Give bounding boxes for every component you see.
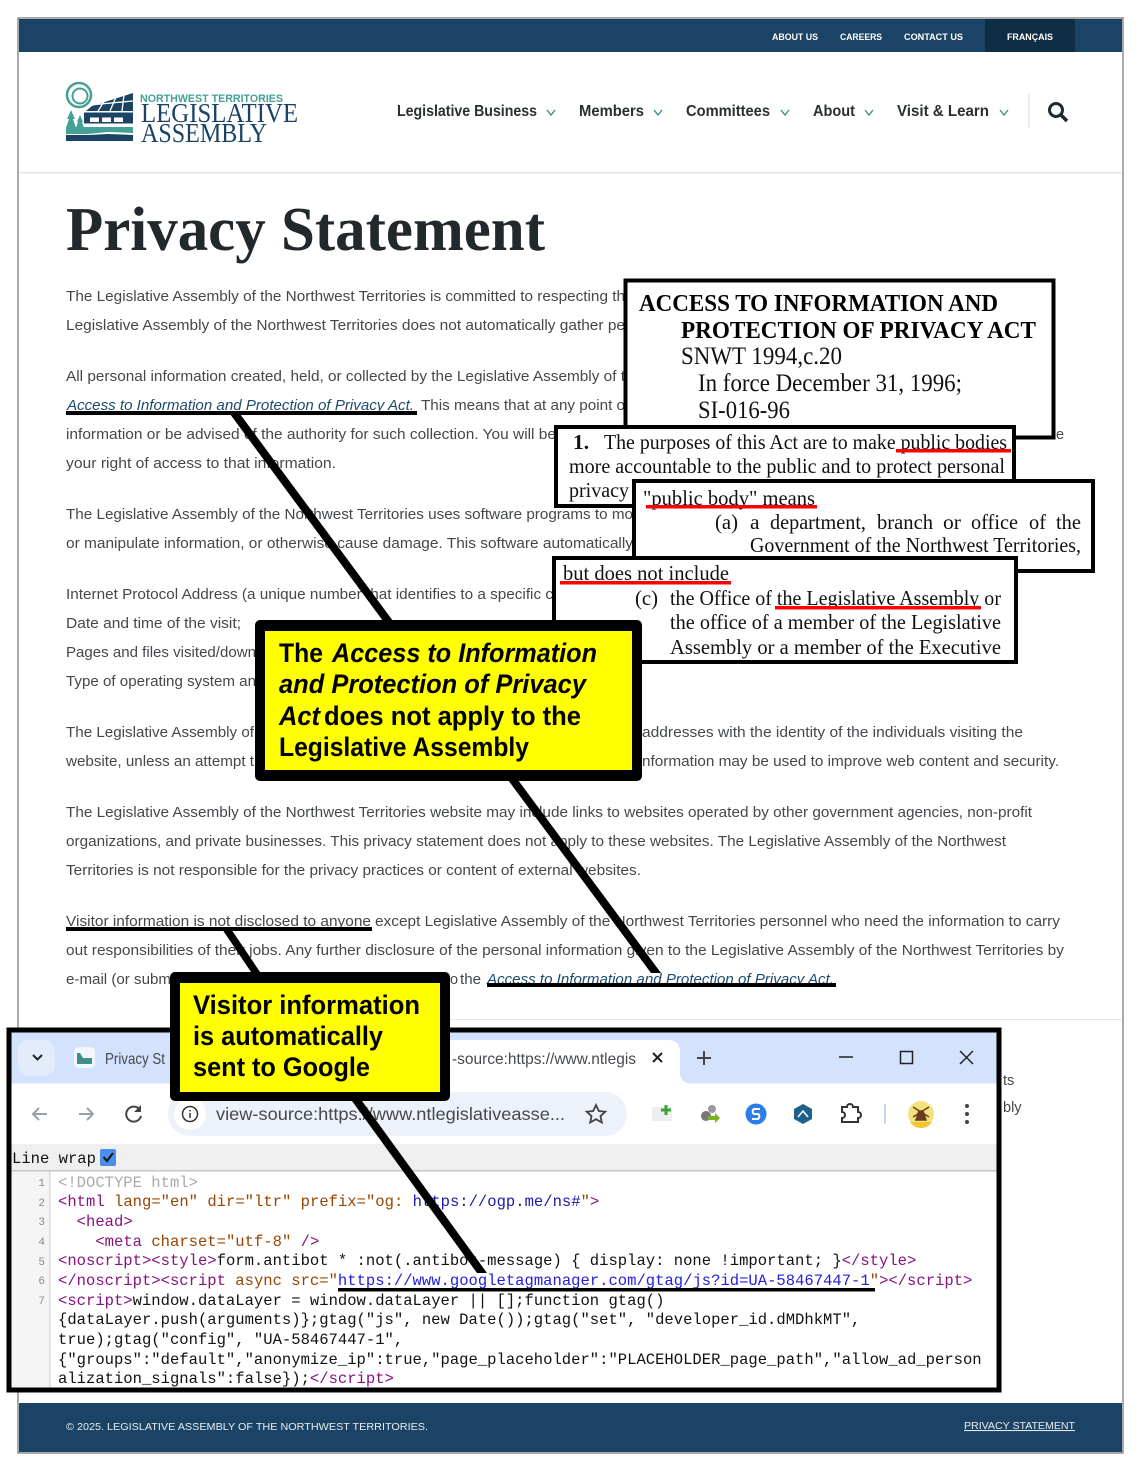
body text: privacy statement paragraphs: e (1056, 427, 1064, 443)
body text: privacy statement paragraphs: The Legislative Assembly of the Northwest Territories is committed to respecting th (66, 289, 625, 305)
source code listing: 7 (38, 1296, 45, 1308)
body text: privacy statement paragraphs: Pages and files visited/down (66, 645, 256, 661)
body text: privacy statement paragraphs: out responsibilities of their jobs. Any further disclosure of the personal information given to the Legislative Assembly of the Northwest Territories by (66, 943, 1065, 959)
source code listing: <noscript><style>form.antibot * :not(.antibot-message) { display: none !important; }</style> (58, 1252, 916, 1270)
main navigation: Members (579, 103, 644, 120)
main navigation: About (813, 103, 855, 120)
callout: Visitor information sent to Google: Visitor information (193, 990, 420, 1020)
body text: privacy statement paragraphs: Internet Protocol Address (a unique number that identifies to a specific c (66, 587, 553, 603)
logo: Northwest Territories Legislative Assembly (66, 83, 298, 148)
source code listing: true);gtag("config", "UA-58467447-1", (58, 1331, 403, 1349)
panel: exclusion of the Legislative Assembly excerpt: (c) (635, 586, 658, 610)
source code listing: {dataLayer.push(arguments)};gtag("js", new Date());gtag("set", "developer_id.dMDhkMT", (58, 1311, 860, 1329)
browser toolbar with address bar: view-source:https://www.ntlegislativeasse... (216, 1104, 565, 1124)
body text: privacy statement paragraphs: Legislative Assembly of the Northwest Territories does not automatically gather pe (66, 318, 625, 334)
source code listing: 6 (38, 1276, 45, 1288)
main navigation: Visit & Learn (897, 103, 989, 120)
source code listing: 4 (38, 1237, 45, 1249)
line wrap option bar (12, 1144, 996, 1172)
callout: Visitor information sent to Google: is automatically (193, 1021, 383, 1051)
main navigation: Committees (686, 103, 770, 120)
callout: Act does not apply to the Legislative Assembly: Access to Information (331, 638, 597, 668)
panel: Act title excerpt: In force December 31, 1996; (698, 370, 962, 397)
main navigation: Legislative Business (397, 103, 537, 120)
body text: privacy statement paragraphs: The Legislative Assembly of the Northwest Territories website may include links to websites operated by other government agencies, non-profit (66, 805, 1032, 821)
source code listing: </noscript><script async src="https://www.googletagmanager.com/gtag/js?id=UA-58467447-1"></script> (58, 1272, 972, 1290)
source code listing: 2 (38, 1198, 45, 1210)
annotation: Google Tag Manager link underline and leader line (338, 1101, 875, 1292)
panel: exclusion of the Legislative Assembly excerpt: but does not include (563, 561, 729, 585)
browser tab bar: Privacy St (105, 1051, 165, 1068)
body text: privacy statement paragraphs: except Legislative Assembly of the Northwest Territories personnel who need the information to carry (375, 914, 1061, 930)
callout: Act does not apply to the Legislative Assembly: The (279, 638, 323, 668)
source code listing: <meta charset="utf-8" /> (58, 1233, 319, 1251)
body text: privacy statement paragraphs: nformation may be used to improve web content and security. (642, 754, 1059, 770)
icon: search (1050, 104, 1067, 121)
browser toolbar with address bar (12, 1084, 996, 1144)
panel: public body definition excerpt: Government of the Northwest Territories, (750, 533, 1081, 557)
panel: Act title excerpt (626, 280, 1054, 438)
panel: Act title excerpt: SI-016-96 (698, 397, 790, 424)
panel: public body definition excerpt: branch (877, 510, 933, 534)
source code listing: alization_signals":false});</script> (58, 1370, 394, 1388)
panel: public body definition excerpt: of (1029, 510, 1047, 534)
body text: privacy statement paragraphs: addresses with the identity of the individuals visiting the (642, 725, 1023, 741)
body text: privacy statement paragraphs: information or be advised of the authority for such collection. You will be (66, 427, 556, 443)
body text: privacy statement paragraphs: This means that at any point o (421, 398, 625, 414)
panel: public body definition excerpt: a (750, 510, 760, 534)
source code listing: {"groups":"default","anonymize_ip":true,"page_placeholder":"PLACEHOLDER_page_path","allow_ad_person (58, 1351, 982, 1369)
panel: purposes of the Act excerpt: privacy (569, 478, 629, 502)
logo: Northwest Territories Legislative Assembly: NORTHWEST TERRITORIES (140, 93, 283, 105)
panel: browser view-source window (9, 1030, 999, 1390)
source code listing: 1 (38, 1178, 45, 1190)
body text: privacy statement paragraphs: Access to Information and Protection of Privacy Act. (486, 972, 834, 988)
callout: Act does not apply to the Legislative Assembly: Act (278, 701, 321, 731)
source code listing: <script>window.dataLayer = window.dataLayer || [];function gtag() (58, 1292, 664, 1310)
title: Privacy Statement (66, 196, 545, 264)
body text: privacy statement paragraphs: ts (1003, 1073, 1014, 1089)
body text: privacy statement paragraphs: Visitor information is not disclosed to anyone (66, 914, 371, 930)
annotation underlines and leader lines (66, 411, 836, 987)
body text: privacy statement paragraphs: or manipulate information, or otherwise cause damage. This software automatically (66, 536, 634, 552)
top utility bar: FRANÇAIS (1007, 32, 1053, 43)
panel: public body definition excerpt: department, (770, 510, 866, 534)
panel: exclusion of the Legislative Assembly excerpt: the office of a member of the Legislative (670, 610, 1001, 634)
body text: privacy statement paragraphs: Date and time of the visit; (66, 616, 241, 632)
line wrap option bar: Line wrap (12, 1150, 96, 1168)
body text: privacy statement paragraphs: Access to Information and Protection of Privacy Act. (66, 398, 414, 414)
panel: purposes of the Act excerpt (556, 427, 1014, 506)
panel: public body definition excerpt: or (943, 510, 961, 534)
top utility bar: ABOUT US (772, 32, 818, 43)
panel: Act title excerpt: ACCESS TO INFORMATION AND (639, 291, 998, 317)
panel: public body definition excerpt: (a) (715, 510, 738, 534)
callout: Act does not apply to the Legislative Assembly (255, 620, 642, 781)
body text: privacy statement paragraphs: All personal information created, held, or collected by the Legislative Assembly of t (66, 369, 625, 385)
body text: privacy statement paragraphs: the (460, 972, 481, 988)
panel: Act title excerpt: SNWT 1994,c.20 (681, 343, 842, 370)
panel: purposes of the Act excerpt: The purposes of this Act are to make public bodies (604, 430, 1007, 454)
panel: public body definition excerpt: "public body" means (643, 486, 815, 510)
footer (19, 1403, 1122, 1452)
panel: purposes of the Act excerpt: more accountable to the public and to protect personal (569, 454, 1005, 478)
panel: exclusion of the Legislative Assembly excerpt (554, 558, 1016, 662)
main navigation (397, 94, 1029, 128)
source code listing (12, 1172, 982, 1388)
callout: Visitor information sent to Google (170, 972, 450, 1101)
body text: privacy statement paragraphs: website, unless an attempt t (65, 754, 254, 770)
panel: exclusion of the Legislative Assembly excerpt: the Office of the Legislative Assembly or (670, 586, 1001, 610)
source code listing: <head> (58, 1213, 133, 1231)
body text: privacy statement paragraphs: Territories is not responsible for the privacy practices or content of external websites. (66, 863, 641, 879)
panel: public body definition excerpt: the (1056, 510, 1081, 534)
panel: public body definition excerpt: office (971, 510, 1018, 534)
callout: Act does not apply to the Legislative Assembly: and Protection of Privacy (279, 669, 587, 699)
body text: privacy statement paragraphs: o (450, 972, 458, 988)
body text: privacy statement paragraphs: organizations, and private businesses. This privacy statement does not apply to these websites. The Legislative Assembly of the Northwest (66, 834, 1006, 850)
body text: privacy statement paragraphs: The Legislative Assembly of the Northwest Territories uses software programs to mo (66, 507, 633, 523)
logo: Northwest Territories Legislative Assembly: LEGISLATIVE (141, 98, 298, 128)
browser tab bar: -source:https://www.ntlegis (452, 1051, 636, 1068)
source code listing: <html lang="en" dir="ltr" prefix="og: https://ogp.me/ns#"> (58, 1193, 599, 1211)
body text: privacy statement paragraphs (65, 289, 1065, 1116)
browser tab bar (12, 1032, 996, 1084)
source code listing: 3 (38, 1217, 45, 1229)
panel: public body definition excerpt (634, 481, 1093, 571)
body text: privacy statement paragraphs: your right of access to that information. (66, 456, 336, 472)
top utility bar: CONTACT US (904, 32, 963, 43)
panel: purposes of the Act excerpt: 1. (573, 430, 589, 454)
top utility bar (19, 19, 1122, 52)
callout: Act does not apply to the Legislative Assembly: does not apply to the (324, 701, 581, 731)
source code listing: 5 (38, 1257, 45, 1269)
body text: privacy statement paragraphs: bly (1003, 1100, 1022, 1116)
panel: exclusion of the Legislative Assembly excerpt: Assembly or a member of the Executive (670, 635, 1001, 659)
callout: Act does not apply to the Legislative Assembly: Legislative Assembly (279, 732, 529, 762)
callout: Visitor information sent to Google: sent to Google (193, 1052, 370, 1082)
footer: PRIVACY STATEMENT (964, 1420, 1076, 1432)
body text: privacy statement paragraphs: Type of operating system an (66, 674, 256, 690)
panel: Act title excerpt: PROTECTION OF PRIVACY ACT (681, 318, 1036, 344)
footer: © 2025. LEGISLATIVE ASSEMBLY OF THE NORTHWEST TERRITORIES. (66, 1421, 428, 1433)
source code listing: <!DOCTYPE html> (58, 1174, 198, 1192)
body text: privacy statement paragraphs: e-mail (or subm (66, 972, 171, 988)
top utility bar: CAREERS (840, 32, 882, 43)
body text: privacy statement paragraphs: The Legislative Assembly of (66, 725, 255, 741)
logo: Northwest Territories Legislative Assembly: ASSEMBLY (141, 118, 267, 148)
